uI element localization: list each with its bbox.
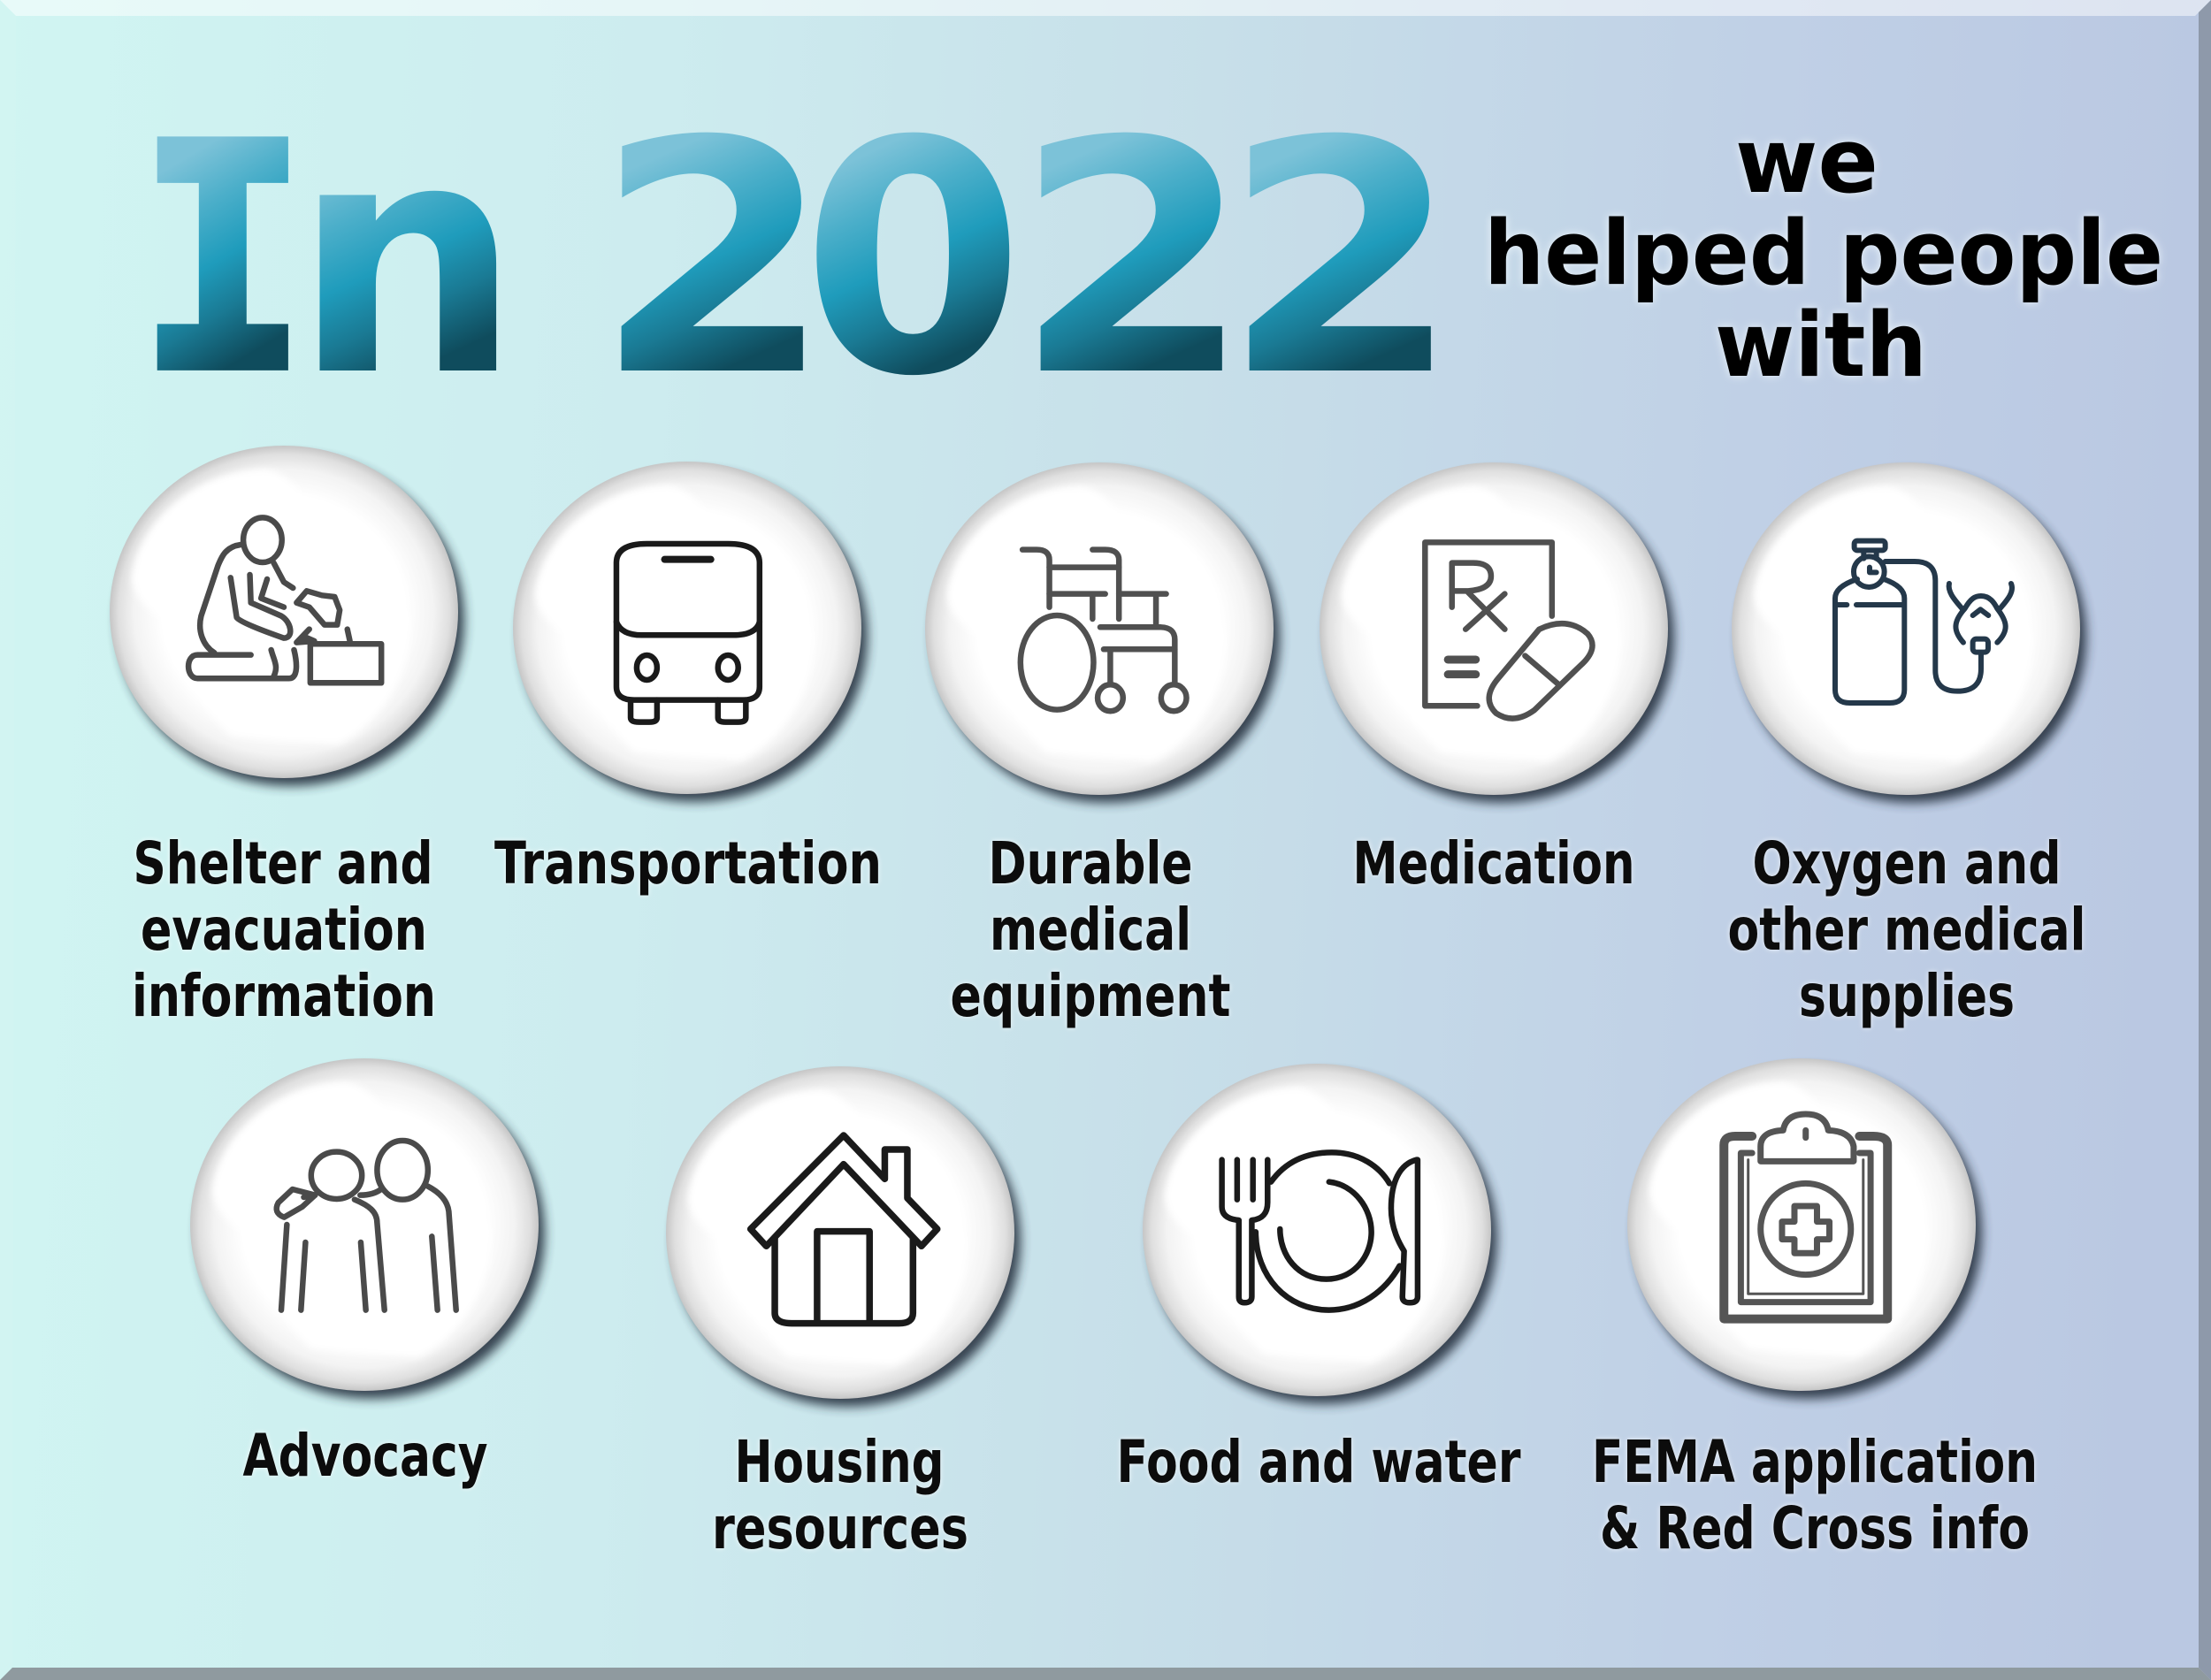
heading: we helped people with <box>1484 109 2163 397</box>
title: In 2022: 2 <box>1014 73 1251 447</box>
bubble: transportation <box>513 462 868 802</box>
panel: oxygen and other medical supplies <box>1728 462 2086 1030</box>
title: In 2022: 2 <box>594 73 832 447</box>
bubble: shelter <box>110 446 464 786</box>
label: durable medical equipment: Durable <box>989 829 1192 897</box>
label: oxygen and other medical supplies <box>1728 829 2085 1030</box>
label: oxygen and other medical supplies: other medical <box>1728 896 2085 964</box>
label: durable medical equipment: medical <box>990 896 1191 964</box>
icon: house <box>751 1135 937 1324</box>
panel: durable medical equipment <box>925 462 1280 1030</box>
title: In 2022: 2 <box>1222 73 1460 447</box>
heading: we helped people with: with <box>1715 293 1927 397</box>
icon: wheelchair <box>1021 550 1187 711</box>
panel: advocacy <box>190 1058 545 1490</box>
icon: bus <box>616 544 760 722</box>
heading: we helped people with: helped people <box>1484 201 2163 305</box>
bubble: FEMA <box>1627 1058 1982 1399</box>
heading: we helped people with: we <box>1735 109 1878 213</box>
label: FEMA application and Red Cross info: & Red Cross info <box>1600 1494 2030 1562</box>
label: food and water: Food and water <box>1116 1428 1521 1496</box>
title: In 2022 <box>136 73 1460 447</box>
bubble: durable medical equipment <box>925 462 1280 803</box>
panel: housing resources <box>666 1066 1021 1562</box>
bubble: housing <box>666 1066 1021 1407</box>
label: oxygen and other medical supplies: supplies <box>1799 962 2015 1030</box>
bubble: medication <box>1320 462 1674 803</box>
label: housing resources: Housing <box>734 1428 945 1496</box>
label: medication: Medication <box>1353 829 1634 897</box>
icon: medical clipboard <box>1724 1114 1887 1319</box>
label: housing resources <box>712 1428 968 1562</box>
bubble: food <box>1143 1064 1497 1404</box>
label: durable medical equipment <box>950 829 1231 1030</box>
label: FEMA application and Red Cross info: FEMA application <box>1592 1428 2038 1496</box>
panel: food and water <box>1116 1064 1521 1496</box>
label: shelter and evacuation information: Shelter and <box>133 829 433 897</box>
label: shelter and evacuation information: evacuation <box>141 896 427 964</box>
title: In 2022: I <box>136 79 310 440</box>
icon: two people with arm around shoulder <box>277 1141 456 1310</box>
panel: medication <box>1320 462 1674 897</box>
label: advocacy: Advocacy <box>242 1422 488 1490</box>
bubble: advocacy <box>190 1058 545 1399</box>
label: durable medical equipment: equipment <box>950 962 1231 1030</box>
bubble: oxygen <box>1732 462 2086 803</box>
title: In 2022: n <box>293 73 521 447</box>
label: FEMA application and Red Cross info <box>1592 1428 2038 1562</box>
icon: oxygen tank and mask <box>1835 541 2012 703</box>
panel: shelter and evacuation information <box>110 446 464 1030</box>
label: transportation: Transportation <box>494 829 882 897</box>
icon: prescription and pill <box>1425 542 1593 719</box>
label: oxygen and other medical supplies: Oxygen and <box>1753 829 2061 897</box>
title: In 2022: 0 <box>801 73 1025 447</box>
panel: FEMA application and Red Cross info <box>1592 1058 2038 1562</box>
label: housing resources: resources <box>712 1494 968 1562</box>
icon: plate, fork and knife <box>1222 1152 1418 1310</box>
icon: person kneeling with dog and box <box>188 517 381 683</box>
label: shelter and evacuation information <box>132 829 436 1030</box>
label: shelter and evacuation information: information <box>132 962 436 1030</box>
panel: transportation <box>494 462 882 897</box>
